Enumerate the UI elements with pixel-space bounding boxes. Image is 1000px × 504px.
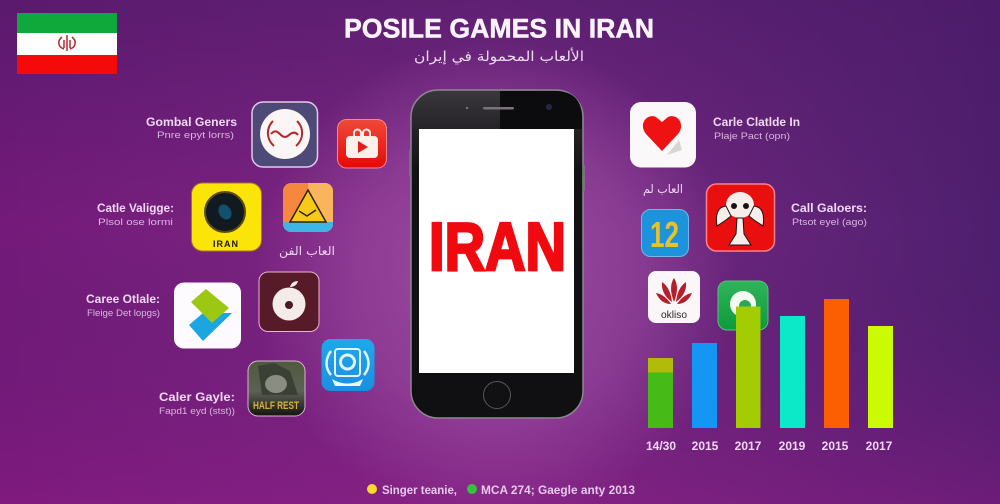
icon: yellow IRAN app: IRAN [213, 239, 239, 249]
bar chart: 2015 [692, 439, 719, 453]
label: Carte Clatlde In [713, 117, 800, 142]
label: Carte Valigge [97, 203, 174, 228]
bar chart: 2015 [822, 439, 849, 453]
icon: dark game app: HALF REST [253, 400, 299, 412]
icon: heart app [630, 102, 696, 168]
arabic caption left: العاب الفن [279, 244, 335, 259]
icon: flower logo app [648, 271, 700, 323]
legend: Singer teanie, [382, 483, 457, 497]
label: Carte Valigge: Plsol ose lormi [98, 217, 173, 228]
icon: blue number app: 12 [650, 214, 679, 255]
label: Carte Otale: Fleige Det lopgs) [87, 308, 160, 319]
title: POSILE GAMES IN IRAN [344, 14, 654, 44]
icon: red skull app [706, 184, 774, 251]
label: Carte Clatlde In: Plaje Pact (opn) [714, 131, 790, 142]
flag of Iran [17, 13, 117, 74]
smartphone [409, 90, 585, 418]
icon: green chat app [718, 281, 768, 330]
label: Call Galoers: Call Galoers: [791, 203, 867, 215]
bar chart: 2019 [779, 439, 806, 453]
icon: dark red apple app [259, 272, 319, 332]
icon: dark game app [248, 361, 305, 416]
icon: grey circle app [252, 102, 318, 167]
subtitle: الألعاب المحمولة في إيران [414, 47, 584, 65]
icon: flower logo app: okliso [661, 310, 687, 321]
label: Carte Clatlde In: Carle Clatlde In [713, 117, 800, 129]
legend: MCA 274; Gaegle anty 2013 [481, 483, 635, 497]
icon: blue shield app [322, 339, 374, 391]
label: Gombal Geners: Pnre epyt lorrs) [157, 130, 234, 141]
bar chart [646, 299, 893, 453]
icon: yellow IRAN app [192, 183, 262, 251]
bar chart: 2017 [735, 439, 762, 453]
label: Caler Gayle [159, 392, 235, 417]
icon: triangle app [283, 183, 333, 232]
legend [367, 483, 635, 497]
label: Caler Gayle: Caler Gayle: [159, 392, 235, 404]
label: Carte Otale: Caree Otlale: [86, 294, 160, 306]
phone screen: IRAN [429, 209, 566, 285]
arabic caption right: العاب لم [643, 182, 683, 196]
label: Call Galoers [791, 203, 867, 228]
label: Carte Valigge: Catle Valigge: [97, 203, 174, 215]
label: Call Galoers: Ptsot eyel (ago) [792, 217, 867, 228]
label: Caler Gayle: Fapd1 eyd (stst)) [159, 406, 235, 417]
label: Gombal Geners [146, 117, 237, 141]
icon: blue number app [642, 210, 688, 256]
bar chart: 2017 [866, 439, 893, 453]
phone screen [419, 129, 574, 373]
icon: red video bag [338, 120, 386, 168]
bar chart: 14/30 [646, 439, 676, 453]
label: Carte Otale [86, 294, 160, 319]
icon: white app with green and blue shapes [174, 282, 241, 348]
label: Gombal Geners: Gombal Geners [146, 117, 237, 129]
bar: first year [648, 358, 673, 428]
